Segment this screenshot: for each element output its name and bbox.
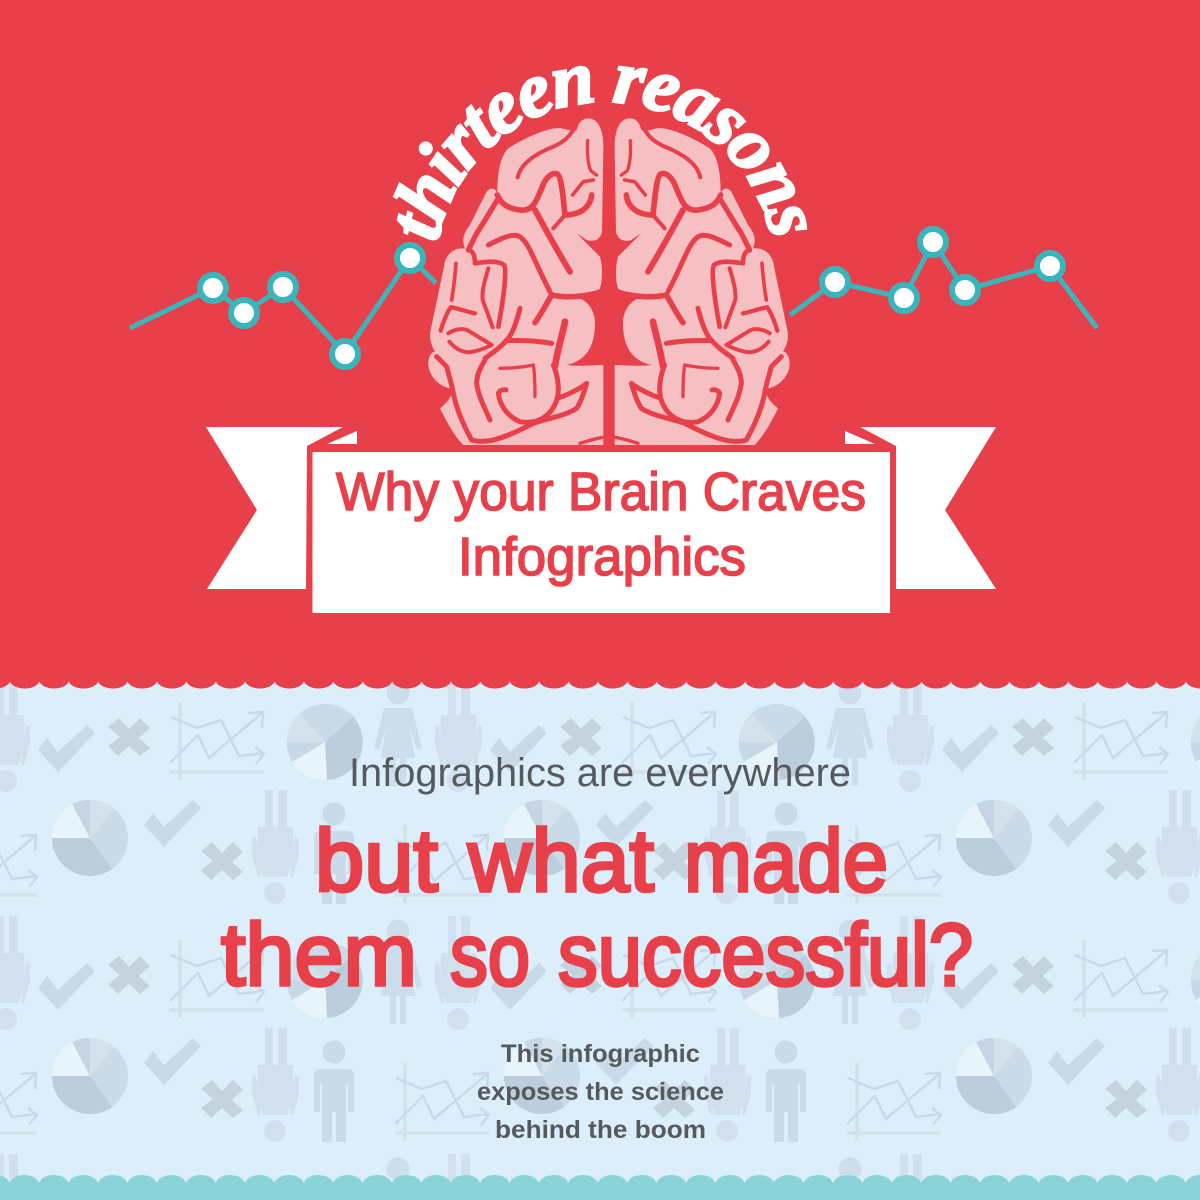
question line 1 <box>315 811 888 910</box>
ribbon banner <box>206 427 996 613</box>
teal scalloped footer <box>0 1170 1200 1200</box>
closing text block: This infographic <box>501 1040 700 1068</box>
right line graph <box>790 229 1097 328</box>
question line 2: so <box>450 905 530 1004</box>
question line 2 <box>221 905 973 1004</box>
lower panel: pale blue background <box>0 670 1200 1200</box>
intro line: Infographics are everywhere <box>349 751 851 795</box>
question line 1: but <box>315 811 438 910</box>
ribbon main panel <box>312 452 890 613</box>
ribbon left tail <box>206 427 343 589</box>
main question <box>221 811 973 1004</box>
header panel: red background with scalloped edge <box>0 0 1200 690</box>
closing text block: exposes the science <box>477 1078 724 1106</box>
left line graph <box>130 245 436 367</box>
brain illustration <box>428 118 790 445</box>
question line 2: successful? <box>558 905 973 1004</box>
question line 2: them <box>221 905 417 1004</box>
curved title: thirteen reasons: thirteen reasons <box>392 66 808 240</box>
ribbon right tail <box>860 427 996 589</box>
closing text block <box>477 1040 724 1144</box>
ribbon right fold <box>845 431 875 444</box>
closing text block: behind the boom <box>495 1116 706 1144</box>
banner heading line 2: Infographics <box>458 527 746 587</box>
banner heading line 1: Why your Brain Craves <box>336 462 866 522</box>
question line 1: made <box>684 811 888 910</box>
ribbon left fold <box>327 431 357 444</box>
question line 1: what <box>467 811 654 910</box>
icon pattern background <box>0 675 1200 1200</box>
